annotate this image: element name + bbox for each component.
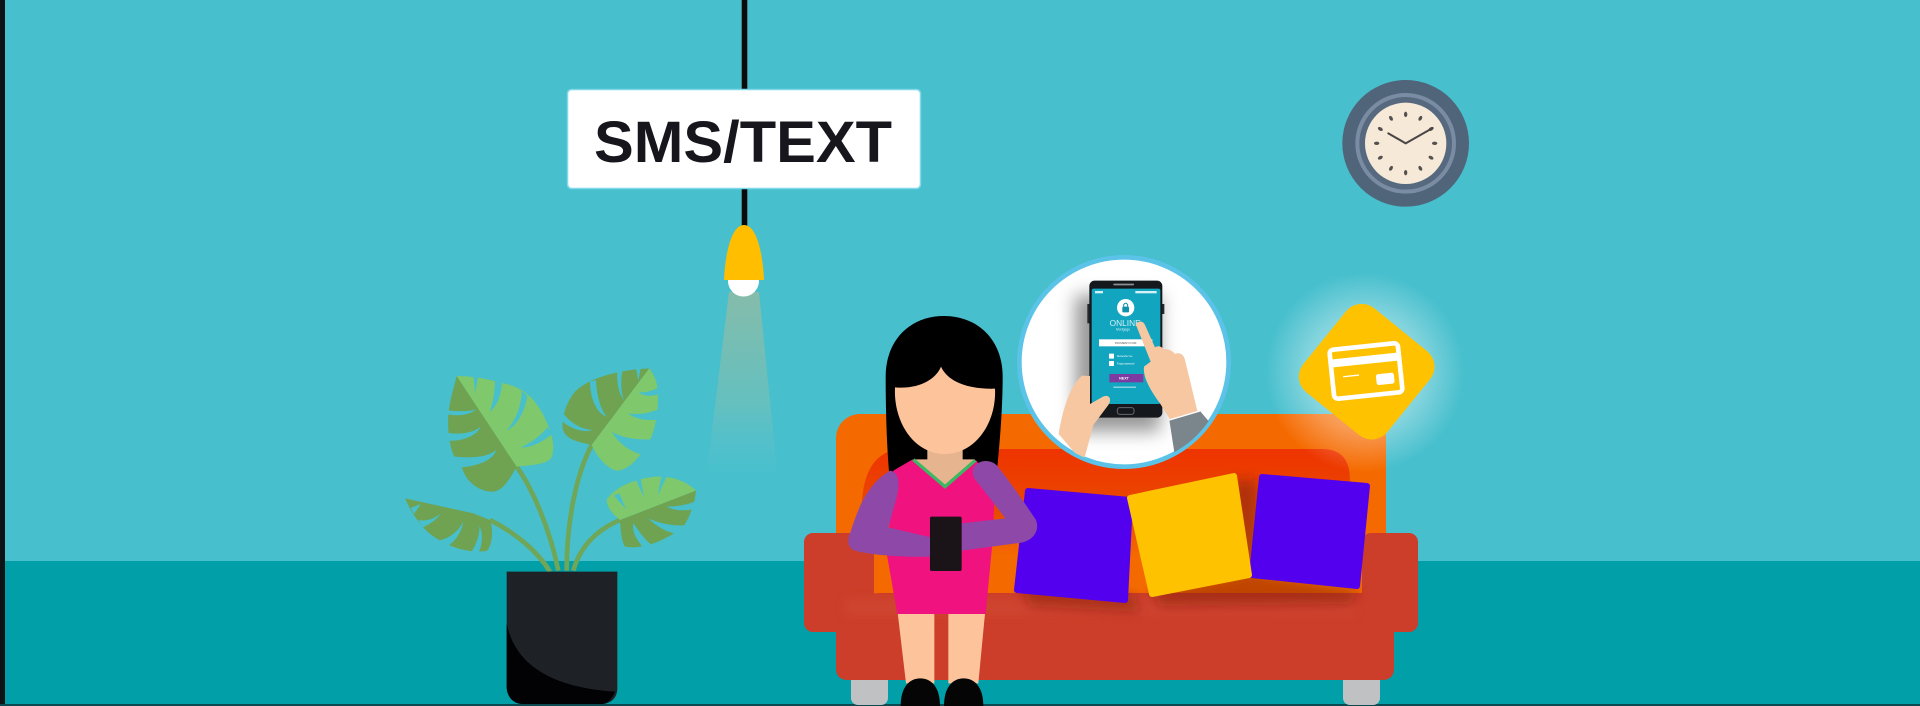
lock icon xyxy=(1117,299,1134,316)
dress xyxy=(887,459,995,614)
floor xyxy=(0,561,1920,706)
light beam xyxy=(706,292,778,480)
field captions: Forgot password xyxy=(1117,362,1135,365)
bottom dark edge xyxy=(0,704,1920,706)
pillow shadows xyxy=(1020,480,1360,612)
status bar icons xyxy=(1095,291,1157,293)
icon: credit card badge xyxy=(1291,296,1443,448)
left arm xyxy=(848,471,931,557)
login field: PAYMENT.COM xyxy=(1115,341,1137,345)
legs xyxy=(897,610,985,683)
right hand xyxy=(1136,321,1197,419)
phone in hands xyxy=(930,517,962,571)
shoes xyxy=(901,678,983,706)
hands xyxy=(1059,321,1213,460)
face xyxy=(895,367,995,454)
sofa back xyxy=(836,414,1386,604)
sofa legs xyxy=(851,672,1380,705)
sleeve cuff xyxy=(1169,411,1200,420)
smartphone xyxy=(1087,281,1164,418)
lamp cord xyxy=(742,0,747,228)
field captions: Remember me xyxy=(1117,355,1133,358)
smartphone: Mortgage xyxy=(1116,327,1130,331)
next button: NEXT xyxy=(1119,377,1130,381)
left pillow xyxy=(1017,491,1130,600)
left hand xyxy=(1059,376,1110,460)
neck xyxy=(914,447,975,487)
left black edge xyxy=(0,0,5,706)
right arm xyxy=(962,461,1037,551)
smartphone: ONLINE xyxy=(1110,318,1141,328)
badge glow xyxy=(1265,272,1465,472)
woman on the sofa xyxy=(848,316,1037,706)
icon: potted plant xyxy=(405,368,696,704)
right pillow xyxy=(1252,477,1367,586)
sofa inner back xyxy=(858,449,1362,593)
sofa arms xyxy=(804,533,1418,632)
sofa xyxy=(804,414,1418,705)
collar xyxy=(913,460,975,487)
heading label: SMS/TEXT xyxy=(568,90,920,188)
heading label: SMS/TEXT: SMS/TEXT xyxy=(594,110,892,175)
field captions xyxy=(1117,355,1135,365)
hair xyxy=(886,316,1003,472)
wall background xyxy=(0,0,1920,562)
sleeve xyxy=(1169,411,1209,452)
icon: wall clock xyxy=(1342,80,1469,207)
phone shadow xyxy=(1075,295,1160,432)
middle pillow xyxy=(1130,476,1249,594)
callout circle: online banking on phone xyxy=(1019,257,1229,467)
icon: ceiling lamp xyxy=(724,225,764,296)
checkboxes xyxy=(1109,354,1114,366)
sofa seat xyxy=(836,593,1394,680)
credit card outline xyxy=(1329,343,1403,399)
